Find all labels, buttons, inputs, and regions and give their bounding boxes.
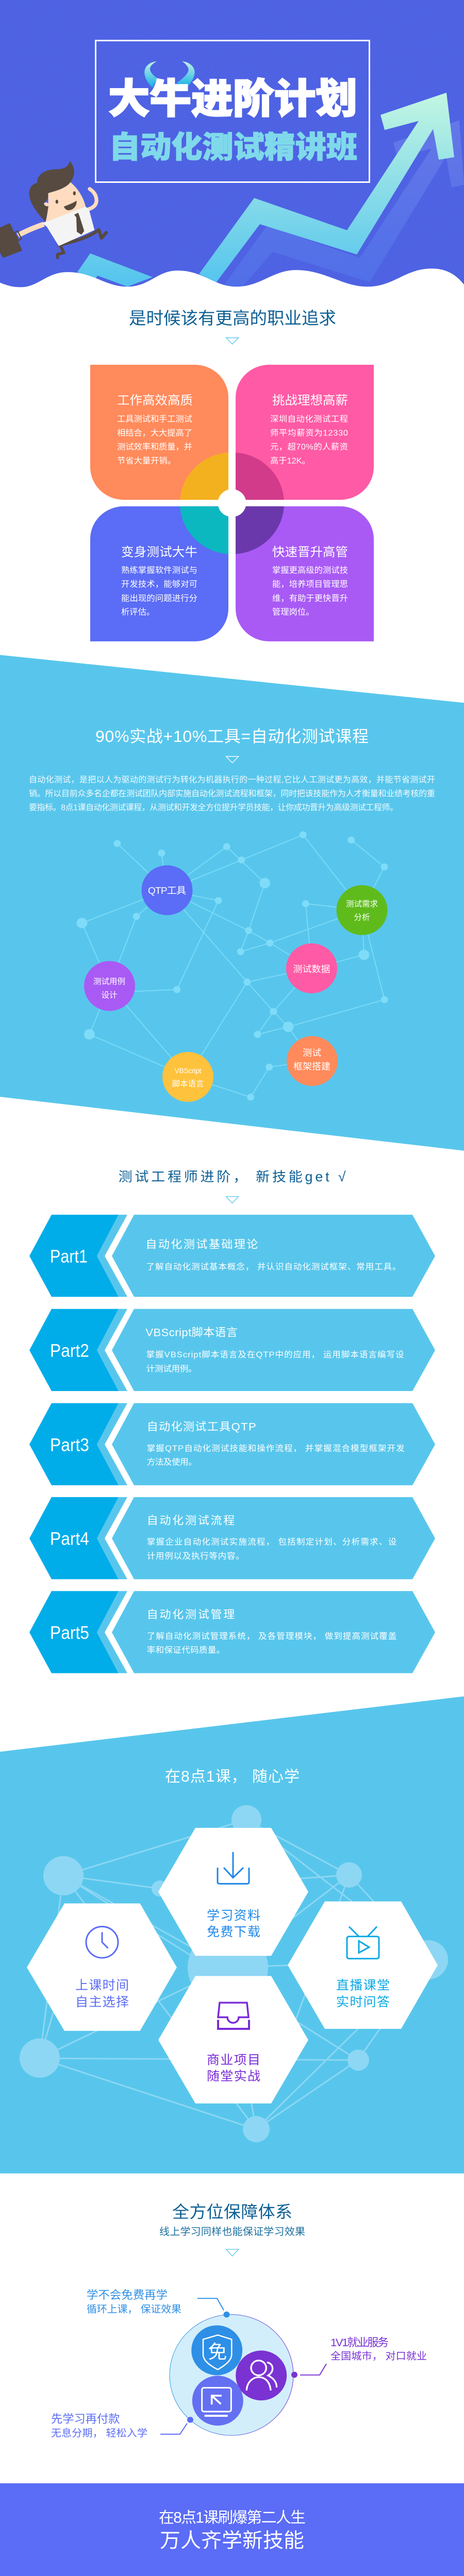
petal: testing expert: 开发技术，能够对可 [121,580,197,589]
petal: management: 维，有助于更快晋升 [272,594,348,603]
icon: clock [86,1926,118,1958]
callout: pay later [51,2413,193,2439]
text: course description: 要指标。8点1课自动化测试课程，从测试和开发全方位提升学员技能，让你成功晋升为高级测试工程师。 [29,803,398,812]
heading: learn as you like: 在8点1课， 随心学 [165,1768,300,1785]
petal: salary: 深圳自动化测试工程 [270,415,348,423]
hexagon: free materials: 学习资料 [207,1908,260,1923]
panel: part 5: 率和保证代码质量。 [147,1646,225,1655]
node: test data: 测试数据 [293,964,330,974]
panel: part 3: 自动化测试工具QTP [147,1420,256,1433]
hexagon: free materials [158,1828,308,1956]
petal: testing expert: 析评估。 [121,607,155,617]
hexagon: commercial projects: 商业项目 [207,2053,260,2067]
hexagon: commercial projects [158,1976,308,2104]
hexagon: flexible schedule [27,1904,177,2031]
background network [20,1805,448,2142]
icon: free shield: 免 [208,2342,227,2362]
hexagon: live class: 直播课堂 [336,1978,390,1993]
icon: download [218,1852,249,1884]
node: requirements analysis: 分析 [354,913,370,922]
panel: course composition [0,655,464,1151]
panel: hero banner [0,0,464,312]
panel: part 5: Part5 [50,1622,89,1643]
wave divider [0,268,464,312]
callout: employment service: 全国城市， 对口就业 [330,2351,427,2362]
panel: part 4: 计用例以及执行等内容。 [147,1552,244,1561]
icon: people [236,2350,287,2400]
text: support subtitle: 线上学习同样也能保证学习效果 [159,2226,305,2238]
node: framework building: 测试 [303,1048,321,1058]
icon: heading triangle [226,338,238,344]
panel: part 2: 掌握VBScript脚本语言及在QTP中的应用， 运用脚本语言编写设 [146,1350,404,1359]
icon: inbox tray [218,2003,249,2029]
text: course description: 销。所以目前众多名企都在测试团队内部实施自动化测试流程和框架，同时把该技能作为人才衡量和业绩考核的重 [29,789,435,799]
petal: testing expert: 熟练掌握软件测试与 [121,566,197,575]
petal: salary: 师平均薪资为12330 [270,429,348,437]
panel: part 3: 方法及使用。 [147,1458,197,1467]
node: VBScript: 脚本语言 [172,1079,204,1088]
panel: part 4 [29,1497,435,1579]
callout: employment service: 1V1就业服务 [330,2336,389,2349]
node: VBScript [162,1052,213,1102]
panel: part 2 [29,1309,435,1391]
petal: efficiency: 测试效率和质量，并 [117,442,192,451]
hexagon: live class: 实时问答 [336,1995,390,2009]
petal: salary [236,365,374,500]
node: QTP tool [141,866,193,915]
petal: management [236,506,374,641]
title: main: 大牛进阶计划 [108,76,357,122]
callout: free re-study: 循环上课， 保证效果 [87,2304,181,2315]
hexagon: free materials: 免费下载 [207,1925,260,1939]
panel: part 3: 掌握QTP自动化测试技能和操作流程， 并掌握混合模型框架开发 [147,1444,405,1453]
panel: part 2: 计测试用例。 [146,1364,197,1374]
panel: learn anywhere [0,1697,464,2174]
panel: part 1 [29,1215,435,1297]
petal: testing expert: 变身测试大牛 [121,546,197,560]
diagram: guarantee circle [51,2289,427,2439]
heading: 90% practice: 90%实战+10%工具=自动化测试课程 [95,727,369,745]
arrow: rising growth line [77,93,454,286]
petal: efficiency: 工具测试和手工测试 [117,415,192,423]
text: course description: 自动化测试，是把以人为驱动的测试行为转化为机器执行的一种过程,它比人工测试更为高效，并能节省测试开 [29,775,435,785]
panel: part 1: 自动化测试基础理论 [145,1238,258,1250]
petal: efficiency: 工作高效高质 [117,394,193,408]
node: QTP tool: QTP工具 [148,885,186,896]
petal: management: 能，培养项目管理思 [272,580,348,589]
petal: efficiency: 相结合，大大提高了 [117,429,192,437]
petal: testing expert: 能出现的问题进行分 [121,594,197,603]
hexagon: flexible schedule: 自主选择 [75,1995,129,2009]
panel: part 5: 了解自动化测试管理系统， 及各管理模块， 做到提高测试覆盖 [147,1632,396,1641]
panel: part 3: Part3 [50,1435,89,1455]
heading: support system: 全方位保障体系 [172,2202,292,2222]
node: test case design: 设计 [102,991,117,1000]
panel: part 3 [29,1403,435,1485]
callout: employment service [291,2336,427,2378]
icon: screen arrow [192,2376,243,2426]
panel: part 1: 了解自动化测试基本概念， 并认识自动化测试框架、常用工具。 [146,1262,401,1272]
panel: part 2: VBScript脚本语言 [145,1326,238,1338]
icon: bull horns [144,61,195,88]
node: requirements analysis [336,885,388,935]
text: footer line 1: 在8点1课刷爆第二人生 [159,2510,306,2526]
node: test data [286,943,337,993]
icon: tv play [347,1926,379,1959]
title: subtitle: 自动化测试精讲班 [109,130,357,164]
node: test case design: 测试用例 [93,977,125,986]
icon: running businessman [0,161,106,258]
callout: pay later: 先学习再付款 [51,2413,120,2426]
petal: salary: 高于12K。 [270,456,310,466]
icon: heading triangle [226,1197,238,1203]
petal: salary: 元，超70%的人薪资 [270,442,348,451]
petal: management: 掌握更高级的测试技 [272,566,348,575]
panel: part 1: Part1 [50,1246,88,1267]
icon: white triangle [226,756,238,763]
icon: free shield [191,2325,242,2375]
petal: management: 管理岗位。 [272,607,314,617]
panel: part 2: Part2 [50,1341,89,1361]
node: requirements analysis: 测试需求 [346,900,378,909]
panel: part 4: 自动化测试流程 [147,1514,235,1527]
petal: testing expert [90,506,228,641]
panel: part 4: 掌握企业自动化测试实施流程， 包括制定计划、分析需求、设 [147,1537,396,1547]
heading: career pursuit: 是时候该有更高的职业追求 [129,309,336,328]
hexagon: flexible schedule: 上课时间 [75,1978,129,1993]
callout: free re-study [87,2289,230,2317]
heading: new skills: 测试工程师进阶， 新技能get √ [119,1169,346,1184]
title frame [96,41,369,182]
petal: management: 快速晋升高管 [272,546,348,560]
panel: four petals [90,365,374,641]
text: footer line 2: 万人齐学新技能 [160,2530,304,2552]
node: test case design [84,961,135,1011]
petal: efficiency [90,365,228,500]
hexagon: commercial projects: 随堂实战 [207,2069,260,2083]
callout: free re-study: 学不会免费再学 [87,2289,168,2301]
hexagon: live class [288,1902,438,2029]
panel: part 5: 自动化测试管理 [147,1608,235,1621]
petal: efficiency: 节省大量开销。 [117,456,176,466]
centre white circle [218,489,246,517]
node: framework building [287,1036,338,1086]
text: course description [29,775,435,812]
panel: part 5 [29,1591,435,1673]
chart: skills network [77,832,388,1102]
panel: part 4: Part4 [50,1529,89,1549]
node: framework building: 框架搭建 [293,1061,330,1072]
arrow: growth shadow [212,121,464,302]
node: VBScript: VBScript [175,1066,202,1075]
icon: heading triangle [226,2249,238,2256]
petal: salary: 挑战理想高薪 [272,394,348,408]
callout: pay later: 无息分期， 轻松入学 [51,2428,147,2439]
panel: footer [0,2483,464,2576]
